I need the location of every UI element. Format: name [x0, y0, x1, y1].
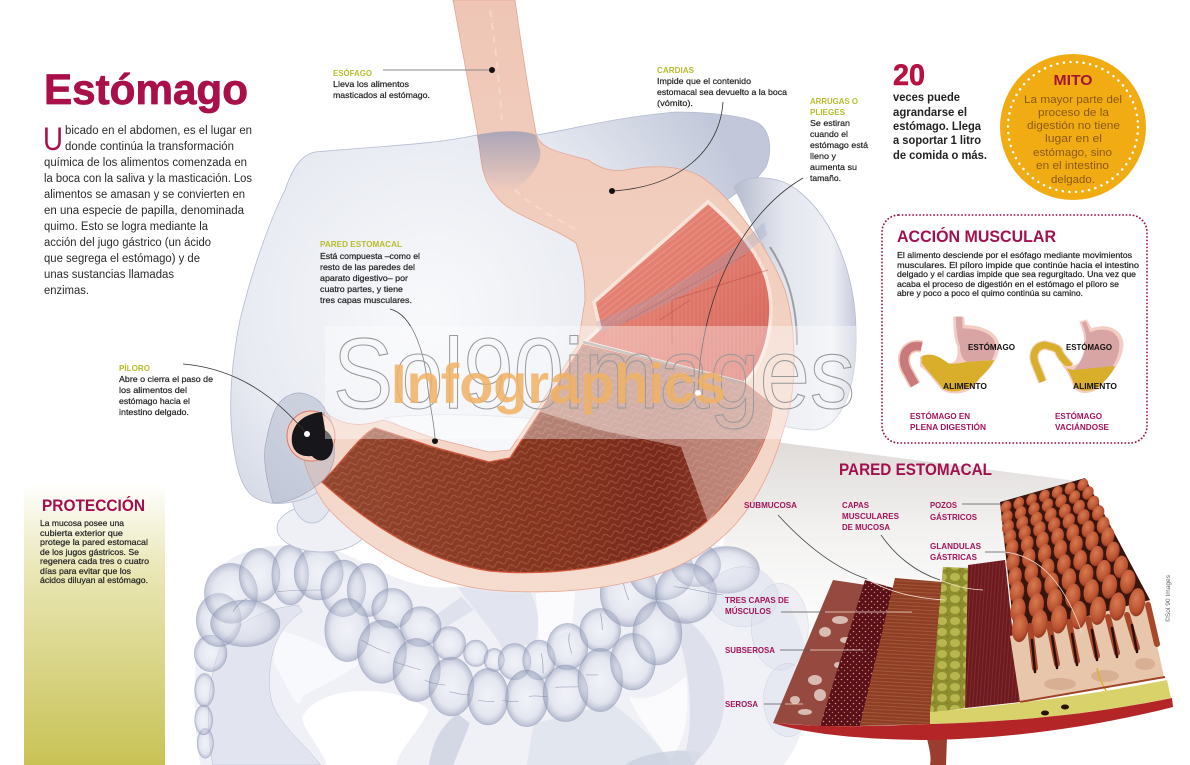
label group: estomago vaciandose: ESTÓMAGO	[1066, 341, 1112, 352]
label: arrugas o pliegues: cuando el	[810, 129, 848, 139]
label group: estomago en plena digestion: PLENA DIGESTIÓN	[910, 421, 986, 432]
intro text: la boca con la saliva y la masticación. Los	[44, 173, 252, 185]
upper row of colon	[347, 563, 388, 617]
panel: accion muscular: El alimento desciende por el esófago mediante movimientos	[897, 250, 1132, 260]
labels: wall layers: SEROSA	[725, 700, 758, 709]
left haustra	[197, 728, 213, 758]
stomach wall cross-section	[773, 477, 1173, 765]
intro text: donde continúa la transformación	[65, 141, 234, 153]
yellow base layer	[930, 680, 1171, 724]
credit: ©Sol 90 Images	[1165, 575, 1172, 622]
labels: wall layers: DE MUCOSA	[842, 523, 890, 532]
label group: estomago en plena digestion: ALIMENTO	[943, 381, 987, 391]
panel: proteccion: PROTECCIÓN	[42, 496, 145, 515]
watermark: Sol90images: Sol90images	[333, 318, 855, 430]
label: arrugas o pliegues: aumenta su	[810, 162, 857, 172]
liver	[231, 112, 770, 503]
layer: serosa	[773, 580, 866, 726]
label: cardias: CARDIAS	[657, 65, 694, 75]
label: arrugas o pliegues: PLIEGES	[810, 107, 845, 117]
fact: 20 veces: veces puede	[893, 90, 960, 104]
labels: wall layers: CAPAS	[842, 501, 870, 510]
callout: mito: La mayor parte del	[1024, 94, 1122, 106]
label: cardias	[609, 65, 787, 194]
callout: mito: MITO	[1054, 72, 1093, 89]
label: piloro: estómago hacia el	[119, 396, 190, 406]
label group: estomago en plena digestion	[910, 341, 1015, 432]
liver overlay on esophagus	[477, 131, 540, 192]
pylorus	[265, 393, 335, 503]
panel: accion muscular: abre y poco a poco el quimo continúa su camino.	[897, 288, 1083, 298]
fact: 20 veces: a soportar 1 litro	[893, 133, 981, 147]
tubes under liver	[277, 467, 367, 552]
fact: 20 veces: de comida o más.	[893, 148, 987, 162]
labels: wall layers	[725, 501, 1082, 709]
small intestine tubes	[457, 587, 538, 650]
icon: stomach emptying	[1034, 319, 1123, 393]
label: pared estomacal: PARED ESTOMACAL	[320, 239, 402, 249]
descending colon tube	[208, 605, 321, 765]
label: pared estomacal: aparato digestivo– por	[320, 273, 408, 283]
label: cardias: estomacal sea devuelto a la boca	[657, 87, 787, 97]
red base layer	[773, 698, 1173, 740]
folded flap	[540, 345, 772, 522]
layer: glands	[965, 560, 1020, 708]
pylorus ring	[287, 411, 335, 461]
stomach	[300, 0, 797, 592]
label: arrugas o pliegues: ARRUGAS O	[810, 96, 858, 106]
pale lobe behind stomach	[385, 415, 545, 458]
labels: wall layers: GLANDULAS	[930, 542, 982, 551]
layer: subserosa	[820, 580, 893, 726]
panel: proteccion: regenera cada tres o cuatro	[40, 556, 149, 566]
labels: wall layers: POZOS	[930, 501, 957, 510]
small vessels	[1041, 704, 1069, 716]
label: arrugas o pliegues: estómago está	[810, 140, 868, 150]
label group: estomago vaciandose: ALIMENTO	[1073, 381, 1117, 391]
vessel stem	[927, 738, 947, 765]
callout: mito	[1000, 54, 1146, 200]
icon: stomach in full digestion	[904, 317, 999, 393]
labels: wall layers: GÁSTRICOS	[930, 512, 978, 522]
label: arrugas o pliegues: tamaño.	[810, 173, 841, 183]
layer: mucosa muscle	[930, 567, 968, 713]
panel: proteccion	[24, 483, 165, 765]
heading: pared estomacal: PARED ESTOMACAL	[839, 460, 992, 479]
label group: estomago vaciandose: VACIÁNDOSE	[1055, 422, 1110, 432]
labels: wall layers: MUSCULARES	[842, 512, 900, 521]
panel: accion muscular: musculares. El píloro impide que continúe hacia el intestino	[897, 260, 1139, 270]
callout: mito: digestión no tiene	[1027, 120, 1120, 132]
label: esofago: masticados al estómago.	[333, 90, 430, 100]
label: pared estomacal: tres capas musculares.	[320, 295, 412, 305]
label: cardias: (vómito).	[657, 98, 693, 108]
labels: wall layers: MÚSCULOS	[725, 605, 772, 616]
label group: estomago vaciandose: ESTÓMAGO	[1055, 410, 1103, 421]
label: pared estomacal: resto de las paredes del	[320, 262, 415, 272]
fact: 20 veces: agrandarse el	[893, 105, 967, 119]
label: arrugas o pliegues: lleno y	[810, 151, 837, 161]
watermark band	[325, 326, 865, 439]
intro text: que segrega el estómago) y de	[44, 253, 200, 265]
label: piloro: PÍLORO	[119, 362, 150, 373]
rugae block	[1000, 477, 1165, 702]
callout: mito: delgado.	[1051, 174, 1095, 186]
label: piloro: intestino delgado.	[119, 407, 189, 417]
intro text	[43, 121, 252, 297]
label: piloro: los alimentos del	[119, 385, 187, 395]
fact: 20 veces	[893, 59, 987, 162]
muscle window	[585, 202, 772, 383]
panel: accion muscular	[882, 215, 1147, 443]
label: esofago: ESÓFAGO	[333, 67, 372, 78]
label: pared estomacal: cuatro partes, y tiene	[320, 284, 403, 294]
esophagus highlights	[490, 10, 580, 232]
label group: estomago en plena digestion: ESTÓMAGO EN	[910, 410, 970, 421]
intro text: acción del jugo gástrico (un ácido	[44, 237, 211, 249]
label: arrugas o pliegues	[695, 96, 868, 396]
drop cap: U	[43, 121, 63, 157]
fact: 20 veces: 20	[893, 59, 925, 92]
label group: estomago vaciandose	[1055, 341, 1117, 432]
callout: mito: proceso de la	[1038, 107, 1110, 119]
labels: wall layers: SUBSEROSA	[725, 646, 775, 655]
intro text: quimo. Esto se logra mediante la	[44, 221, 209, 233]
gastric mucosa	[322, 342, 772, 573]
panel: proteccion: protege la pared estomacal	[40, 537, 148, 547]
callout: mito: estómago, sino	[1033, 147, 1112, 159]
colon fold marks	[233, 580, 723, 702]
title: Estómago	[44, 66, 248, 114]
callout: mito: en el intestino	[1036, 160, 1109, 172]
panel: proteccion: ácidos diluyan al estómago.	[40, 575, 148, 585]
stomach outer wall and esophagus	[300, 0, 794, 592]
labels: wall layers: TRES CAPAS DE	[725, 596, 790, 605]
pylorus opening	[292, 412, 333, 460]
intro text: en una especie de papilla, denominada	[44, 205, 245, 217]
label: pared estomacal: Está compuesta –como el	[320, 251, 420, 261]
panel: accion muscular: ACCIÓN MUSCULAR	[897, 227, 1056, 246]
label: esofago: Lleva los alimentos	[333, 79, 409, 89]
lower row of colon	[325, 598, 370, 662]
spleen	[734, 178, 856, 430]
white gaps between loops	[302, 691, 429, 765]
panel: accion muscular: delgado y el cardias impide que sea regurgitado. Una vez que	[897, 269, 1136, 279]
label: cardias: Impide que el contenido	[657, 76, 751, 86]
callout: mito: lugar en el	[1045, 133, 1102, 145]
intro text: alimentos se amasan y se convierten en	[44, 189, 245, 201]
labels: wall layers: GÁSTRICAS	[930, 552, 978, 562]
label: piloro	[119, 362, 310, 437]
panel: accion muscular: acaba el proceso de digestión en el estómago el píloro se	[897, 279, 1119, 289]
intro text: química de los alimentos comenzada en	[44, 157, 247, 169]
fact: 20 veces: estómago. Llega	[893, 119, 981, 133]
detail backdrop wedge	[700, 438, 1085, 640]
label: piloro: Abre o cierra el paso de	[119, 374, 213, 384]
liver edge over muscle	[596, 222, 767, 332]
panel: proteccion: cubierta exterior que	[40, 528, 123, 538]
intestines	[194, 542, 812, 765]
pylorus translucent lobe	[265, 393, 335, 503]
layer: muscle	[860, 578, 942, 726]
watermark: Infographics: Infographics	[391, 352, 726, 415]
label: esofago	[333, 67, 495, 100]
intro text: bicado en el abdomen, es el lugar en	[65, 125, 252, 137]
dark outer rim	[770, 247, 797, 345]
labels: wall layers: SUBMUCOSA	[744, 501, 797, 510]
panel: proteccion: días para evitar que los	[40, 566, 131, 576]
label group: estomago en plena digestion: ESTÓMAGO	[968, 341, 1015, 352]
label: pared estomacal	[320, 239, 438, 444]
label: arrugas o pliegues: Se estiran	[810, 118, 850, 128]
panel: proteccion: La mucosa posee una	[40, 518, 124, 528]
panel: proteccion: de los jugos gástricos. Se	[40, 547, 139, 557]
intro text: unas sustancias llamadas	[44, 269, 174, 281]
intro text: enzimas.	[44, 285, 89, 297]
